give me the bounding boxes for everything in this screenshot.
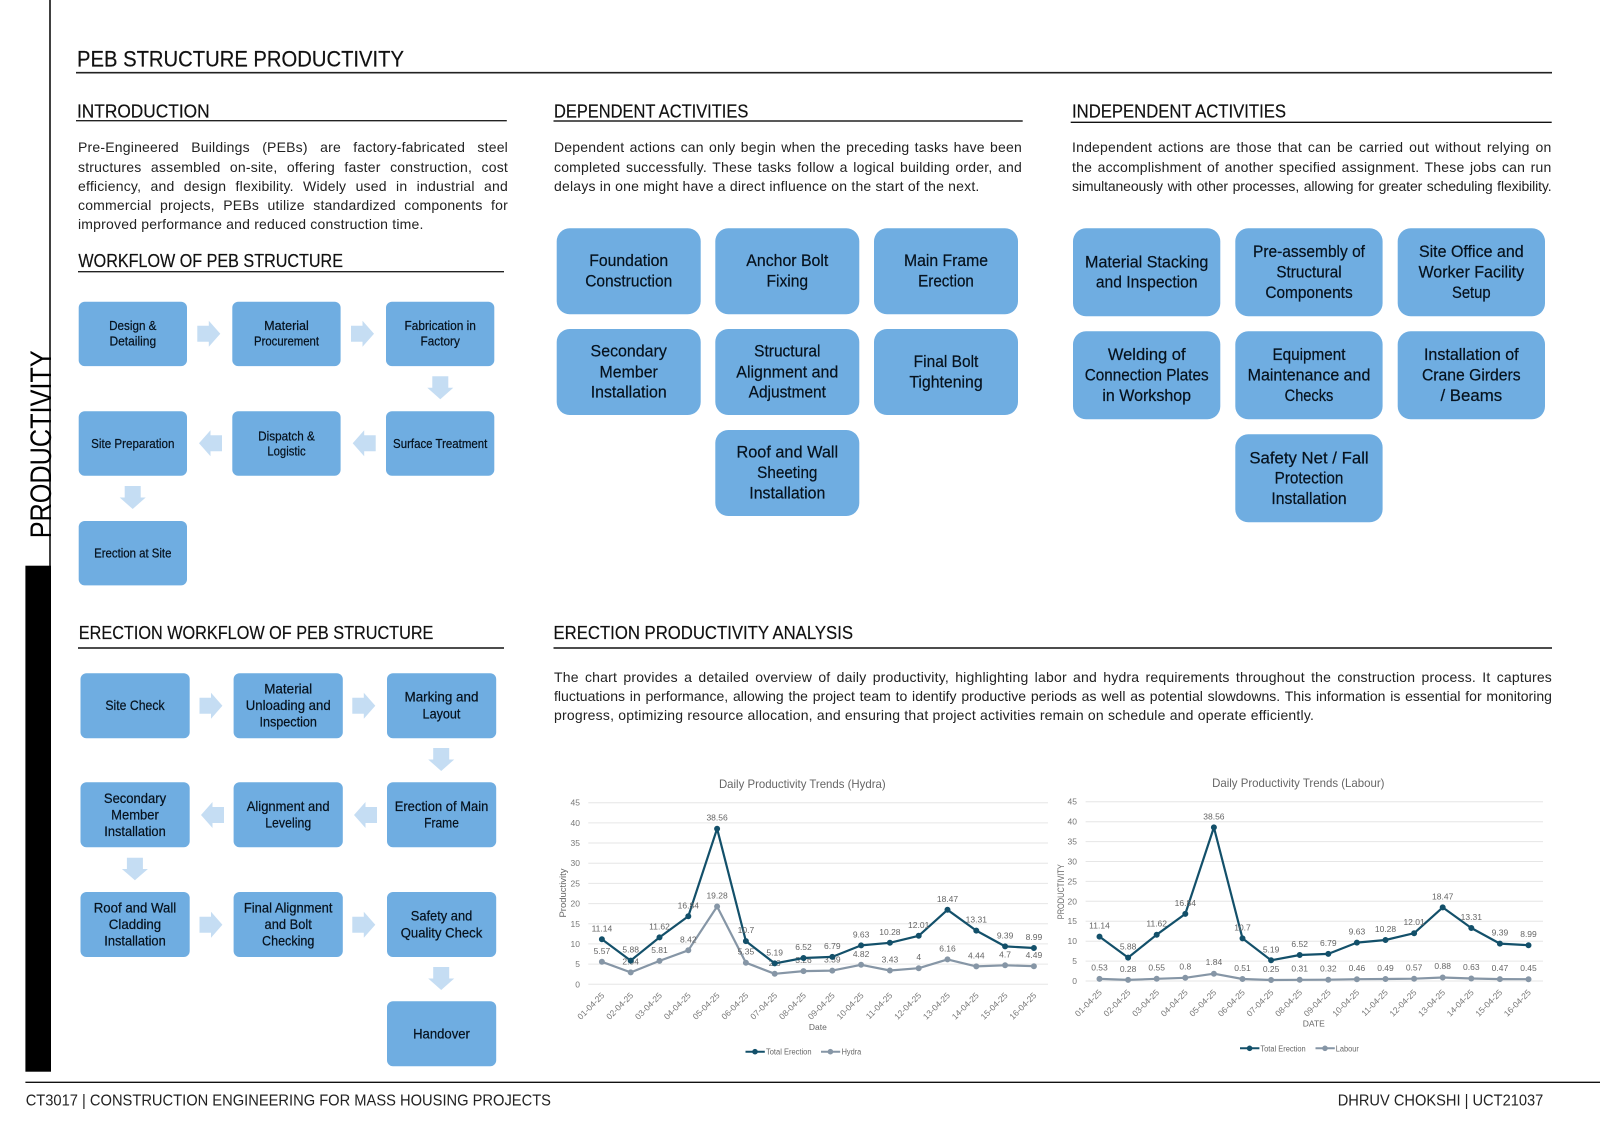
activity: roof and wall sheeting installation: Sheeting bbox=[757, 463, 817, 482]
step: erection at site: Erection at Site bbox=[94, 546, 171, 561]
x axis labels: 16-04-25 bbox=[1502, 987, 1533, 1018]
independent text: the accomplishment of another specified assignment. These jobs can run bbox=[1072, 159, 1552, 175]
series: total erection: 18.47 bbox=[937, 894, 958, 904]
step: alignment and leveling: Alignment and bbox=[247, 798, 330, 814]
x axis labels: 14-04-25 bbox=[950, 990, 981, 1021]
x axis labels: 10-04-25 bbox=[834, 990, 866, 1021]
x axis labels: 11-04-25 bbox=[864, 990, 895, 1021]
x axis labels: 11-04-25 bbox=[1359, 987, 1390, 1018]
y axis labels: 5 bbox=[1072, 956, 1077, 966]
series: total erection: 12.01 bbox=[1403, 917, 1425, 927]
activity: equipment maintenance and checks: Equipment bbox=[1272, 345, 1346, 364]
step: secondary member installation: Installation bbox=[104, 823, 166, 839]
footer bbox=[25, 1082, 1600, 1110]
y axis labels bbox=[1068, 797, 1077, 986]
series: labour: 0.49 bbox=[1377, 963, 1394, 973]
step: material procurement: Material bbox=[264, 318, 309, 333]
arrow bbox=[122, 858, 148, 880]
x axis labels: 06-04-25 bbox=[1216, 987, 1247, 1018]
activity: final bolt tightening bbox=[874, 329, 1018, 415]
panel: workflow of PEB structure bbox=[78, 250, 504, 585]
x axis labels: 13-04-25 bbox=[921, 990, 952, 1021]
activity: equipment maintenance and checks: Maintenance and bbox=[1248, 366, 1370, 385]
activity: welding of connection plates: Welding of bbox=[1108, 345, 1186, 364]
series: total erection: 6.79 bbox=[824, 941, 841, 951]
activity: safety net installation: Safety Net / Fall bbox=[1249, 448, 1369, 467]
activity: final bolt tightening: Final Bolt bbox=[914, 352, 979, 371]
series: total erection bbox=[592, 813, 1042, 966]
step: design and detailing: Design & bbox=[109, 318, 157, 333]
activity: site office and worker facility setup: Worker Facility bbox=[1418, 263, 1525, 282]
series: hydra: 4.82 bbox=[853, 949, 870, 959]
dependent text: Dependent actions can only begin when the preceding tasks have been bbox=[554, 139, 1022, 155]
y axis labels: 15 bbox=[1068, 916, 1077, 926]
series: total erection: 11.62 bbox=[649, 921, 670, 931]
series: labour: 0.55 bbox=[1148, 962, 1165, 972]
activity: material stacking and inspection: Material Stacking bbox=[1085, 252, 1208, 271]
series: total erection: 10.7 bbox=[1234, 922, 1251, 932]
step: fabrication in factory bbox=[386, 302, 494, 366]
series: hydra: 8.42 bbox=[680, 934, 697, 944]
independent text: Independent actions are those that can be carried out without relying on bbox=[1072, 139, 1552, 155]
series: hydra: 5.81 bbox=[651, 945, 668, 955]
y axis labels: 30 bbox=[571, 858, 580, 868]
panel: introduction: INTRODUCTION bbox=[77, 100, 210, 122]
activity: welding of connection plates: in Workshop bbox=[1102, 386, 1191, 405]
step: roof and wall cladding installation: Roof and Wall bbox=[94, 899, 176, 915]
series: labour: 0.63 bbox=[1463, 962, 1480, 972]
y axis labels: 35 bbox=[1068, 837, 1077, 847]
activity: foundation construction: Foundation bbox=[589, 251, 668, 270]
activity: installation of crane girders bbox=[1398, 331, 1545, 419]
series: total erection: 12.01 bbox=[908, 920, 930, 930]
step: final alignment and bolt checking: Final Alignment bbox=[244, 899, 333, 915]
x axis labels: 07-04-25 bbox=[748, 990, 779, 1021]
series: total erection: 13.31 bbox=[966, 915, 987, 925]
step: fabrication in factory: Factory bbox=[421, 334, 460, 348]
activity: site office and worker facility setup: Site Office and bbox=[1419, 242, 1524, 261]
activity: welding of connection plates: Connection Plates bbox=[1085, 366, 1209, 385]
step: final alignment and bolt checking bbox=[234, 892, 343, 957]
series: total erection: 10.7 bbox=[738, 925, 754, 935]
series: hydra: 19.28 bbox=[706, 890, 728, 900]
independent text bbox=[1072, 138, 1552, 198]
y axis labels: 45 bbox=[571, 798, 580, 808]
series: total erection bbox=[1089, 811, 1537, 963]
step: fabrication in factory: Fabrication in bbox=[405, 318, 476, 333]
x axis labels: 05-04-25 bbox=[1187, 987, 1219, 1018]
series: labour: 0.25 bbox=[1263, 964, 1280, 974]
step: erection of main frame: Erection of Main bbox=[395, 798, 488, 814]
panel: erection workflow bbox=[78, 622, 504, 1066]
x axis labels: 03-04-25 bbox=[1130, 987, 1161, 1018]
arrow bbox=[200, 693, 222, 719]
step: design and detailing bbox=[79, 302, 187, 366]
step: marking and layout: Marking and bbox=[404, 689, 478, 705]
analysis text: progress, optimizing resource allocation, and ensuring that project activities remain on schedule and operate efficiently. bbox=[554, 707, 1314, 723]
activity: installation of crane girders: Installation of bbox=[1424, 345, 1519, 364]
footer course name: CT3017 | CONSTRUCTION ENGINEERING FOR MASS HOUSING PROJECTS bbox=[26, 1093, 551, 1110]
step: site preparation bbox=[79, 411, 187, 476]
series: hydra bbox=[594, 890, 1042, 977]
introduction text bbox=[78, 138, 509, 236]
activity: foundation construction bbox=[557, 228, 701, 314]
x axis labels: 04-04-25 bbox=[662, 990, 693, 1021]
activity: roof and wall sheeting installation bbox=[715, 430, 859, 516]
step: erection at site bbox=[79, 521, 187, 585]
y axis labels: 10 bbox=[1068, 936, 1077, 946]
activity: structural alignment and adjustment bbox=[715, 329, 859, 415]
y axis labels: 0 bbox=[1072, 976, 1077, 986]
y axis labels: 20 bbox=[1068, 896, 1077, 906]
series: labour: 0.46 bbox=[1349, 963, 1365, 973]
step: final alignment and bolt checking: and Bolt bbox=[265, 916, 312, 932]
legend bbox=[1240, 1044, 1359, 1053]
series: total erection: 16.84 bbox=[678, 900, 699, 910]
y axis labels: 5 bbox=[575, 959, 580, 969]
step: dispatch and logistic bbox=[232, 411, 341, 476]
activity: anchor bolt fixing bbox=[715, 228, 859, 314]
analysis text bbox=[554, 668, 1553, 728]
x axis labels: 08-04-25 bbox=[1273, 987, 1304, 1018]
activity: pre-assembly of structural components: Structural bbox=[1276, 263, 1342, 282]
series: labour: 0.45 bbox=[1520, 963, 1537, 973]
step: safety and quality check: Quality Check bbox=[401, 924, 483, 940]
step: material procurement bbox=[232, 302, 341, 366]
panel: erection productivity analysis bbox=[554, 622, 1553, 1057]
x axis labels: 01-04-25 bbox=[575, 990, 607, 1021]
series: hydra: 5.35 bbox=[738, 947, 754, 957]
x axis labels: 07-04-25 bbox=[1244, 987, 1276, 1018]
arrow bbox=[353, 430, 376, 456]
series: hydra: 4.49 bbox=[1026, 950, 1042, 960]
panel: independent activities bbox=[1071, 100, 1552, 522]
step: handover: Handover bbox=[413, 1025, 470, 1041]
series: total erection: 9.39 bbox=[997, 930, 1014, 940]
arrow bbox=[352, 693, 375, 719]
activity: structural alignment and adjustment: Structural bbox=[754, 342, 820, 361]
series: total erection: 38.56 bbox=[706, 813, 728, 823]
x axis labels: 09-04-25 bbox=[1302, 987, 1333, 1018]
series: hydra: 3.39 bbox=[824, 955, 841, 965]
analysis heading: ERECTION PRODUCTIVITY ANALYSIS bbox=[554, 622, 853, 643]
legend: Labour bbox=[1336, 1044, 1359, 1053]
activity: site office and worker facility setup bbox=[1398, 228, 1545, 316]
chart title: Daily Productivity Trends (Hydra) bbox=[719, 777, 886, 791]
arrow bbox=[199, 430, 222, 456]
introduction text: structures assembled on-site, offering faster construction, cost bbox=[78, 159, 508, 175]
dependent text bbox=[554, 138, 1023, 198]
footer author: DHRUV CHOKSHI | UCT21037 bbox=[1338, 1093, 1543, 1110]
x axis labels: 02-04-25 bbox=[1101, 987, 1133, 1018]
y axis labels: 40 bbox=[571, 818, 580, 828]
series: total erection: 9.63 bbox=[1349, 927, 1365, 937]
panel: introduction bbox=[76, 100, 509, 236]
series: total erection: 11.14 bbox=[1089, 921, 1110, 931]
activity: main frame erection: Main Frame bbox=[904, 251, 988, 270]
erection workflow heading: ERECTION WORKFLOW OF PEB STRUCTURE bbox=[79, 622, 433, 643]
arrow bbox=[197, 321, 220, 347]
step: alignment and leveling bbox=[234, 782, 343, 847]
line chart: labour bbox=[1056, 776, 1543, 1053]
arrow bbox=[351, 321, 374, 347]
series: total erection: 5.19 bbox=[766, 947, 783, 957]
activity: structural alignment and adjustment: Adjustment bbox=[749, 383, 826, 402]
chart title: Daily Productivity Trends (Labour) bbox=[1212, 776, 1385, 790]
legend: Total Erection bbox=[766, 1048, 812, 1057]
activity: pre-assembly of structural components: Pre-assembly of bbox=[1253, 242, 1365, 261]
sidebar title: PRODUCTIVITY bbox=[25, 350, 58, 538]
activity: equipment maintenance and checks: Checks bbox=[1285, 386, 1333, 405]
series: total erection: 11.62 bbox=[1146, 919, 1167, 929]
step: site check bbox=[80, 673, 190, 738]
series: labour bbox=[1091, 957, 1537, 983]
arrow bbox=[352, 912, 375, 938]
step: erection of main frame bbox=[387, 782, 496, 847]
independent heading: INDEPENDENT ACTIVITIES bbox=[1072, 100, 1286, 121]
y axis labels: 45 bbox=[1068, 797, 1077, 807]
x axis labels: 06-04-25 bbox=[719, 990, 751, 1021]
x axis labels: 02-04-25 bbox=[604, 990, 635, 1021]
y axis labels: 25 bbox=[571, 878, 580, 888]
step: safety and quality check: Safety and bbox=[411, 908, 472, 924]
step: handover bbox=[387, 1001, 496, 1066]
y axis labels: 25 bbox=[1068, 876, 1077, 886]
series: hydra: 5.57 bbox=[594, 946, 610, 956]
step: site check: Site Check bbox=[105, 697, 165, 713]
series: labour: 0.47 bbox=[1492, 963, 1508, 973]
series: hydra: 3.26 bbox=[795, 955, 812, 965]
activity: site office and worker facility setup: Setup bbox=[1452, 283, 1491, 302]
series: total erection: 6.52 bbox=[795, 942, 812, 952]
independent text: simultaneously with other processes, allowing for greater scheduling flexibility. bbox=[1072, 178, 1552, 194]
x axis labels: 05-04-25 bbox=[690, 990, 722, 1021]
activity: pre-assembly of structural components bbox=[1235, 228, 1383, 316]
step: marking and layout bbox=[387, 673, 496, 738]
step: roof and wall cladding installation: Cladding bbox=[109, 916, 161, 932]
series: hydra: 2.94 bbox=[622, 956, 639, 966]
arrow bbox=[354, 802, 377, 828]
series: total erection: 11.14 bbox=[592, 923, 612, 933]
activity: roof and wall sheeting installation: Installation bbox=[749, 484, 825, 503]
series: total erection: 5.88 bbox=[1120, 942, 1137, 952]
activity: material stacking and inspection: and Inspection bbox=[1096, 273, 1198, 292]
series: total erection: 38.56 bbox=[1203, 811, 1225, 821]
step: marking and layout: Layout bbox=[423, 705, 461, 721]
x axis labels: 16-04-25 bbox=[1007, 990, 1039, 1021]
activity: pre-assembly of structural components: Components bbox=[1265, 283, 1353, 302]
x axis labels: 09-04-25 bbox=[806, 990, 837, 1021]
step: safety and quality check bbox=[387, 892, 496, 957]
legend: Hydra bbox=[842, 1048, 862, 1057]
x axis labels: 12-04-25 bbox=[1387, 987, 1419, 1018]
step: erection of main frame: Frame bbox=[424, 815, 459, 831]
activity: installation of crane girders: Crane Girders bbox=[1422, 366, 1521, 385]
series: labour: 0.32 bbox=[1320, 964, 1337, 974]
x axis labels: 13-04-25 bbox=[1416, 987, 1447, 1018]
y axis labels: 40 bbox=[1068, 817, 1077, 827]
arrow bbox=[120, 486, 146, 509]
step: surface treatment bbox=[386, 411, 494, 476]
series: total erection: 10.28 bbox=[1375, 924, 1396, 934]
analysis text: fluctuations in performance, allowing the project team to identify productive periods as well as potential slowdowns. This information is essential for monitoring bbox=[554, 688, 1552, 704]
arrow bbox=[201, 802, 224, 828]
series: labour: 0.28 bbox=[1120, 964, 1137, 974]
series: total erection: 8.99 bbox=[1520, 929, 1537, 939]
arrow bbox=[200, 912, 222, 938]
step: roof and wall cladding installation: Installation bbox=[104, 933, 166, 949]
step: dispatch and logistic: Logistic bbox=[267, 444, 306, 458]
x axis labels: 15-04-25 bbox=[1473, 987, 1505, 1018]
series: labour: 0.51 bbox=[1234, 963, 1251, 973]
x axis labels: 01-04-25 bbox=[1073, 987, 1104, 1018]
arrow bbox=[428, 748, 454, 771]
step: material unloading and inspection: Material bbox=[264, 680, 312, 696]
series: labour: 0.8 bbox=[1179, 962, 1191, 972]
y axis labels: 20 bbox=[571, 899, 580, 909]
activity: material stacking and inspection bbox=[1073, 228, 1220, 316]
workflow heading: WORKFLOW OF PEB STRUCTURE bbox=[78, 250, 343, 271]
arrow bbox=[427, 376, 453, 399]
step: roof and wall cladding installation bbox=[80, 892, 190, 957]
series: total erection: 9.39 bbox=[1492, 928, 1508, 938]
activity: final bolt tightening: Tightening bbox=[909, 373, 983, 392]
x axis labels: 14-04-25 bbox=[1445, 987, 1476, 1018]
activity: installation of crane girders: / Beams bbox=[1440, 386, 1502, 405]
series: labour: 0.53 bbox=[1091, 962, 1108, 972]
activity: anchor bolt fixing: Anchor Bolt bbox=[746, 251, 829, 270]
series: hydra: 3.43 bbox=[882, 954, 898, 964]
series: total erection: 6.79 bbox=[1320, 938, 1337, 948]
series: total erection: 9.63 bbox=[853, 929, 870, 939]
activity: secondary member installation: Secondary bbox=[591, 342, 667, 361]
series: total erection: 13.31 bbox=[1461, 912, 1482, 922]
series: total erection: 5.19 bbox=[1263, 944, 1280, 954]
series: total erection: 16.84 bbox=[1175, 898, 1196, 908]
activity: welding of connection plates bbox=[1073, 331, 1220, 419]
y axis labels bbox=[571, 798, 580, 989]
step: alignment and leveling: Leveling bbox=[265, 815, 311, 831]
x axis labels: 04-04-25 bbox=[1159, 987, 1190, 1018]
activity: safety net installation: Installation bbox=[1271, 489, 1347, 508]
introduction text: commercial projects, PEBs utilize standardized components for bbox=[78, 197, 508, 213]
activity: main frame erection: Erection bbox=[918, 272, 974, 291]
activity: secondary member installation: Installation bbox=[591, 383, 667, 402]
x axis labels: 12-04-25 bbox=[892, 990, 923, 1021]
x axis title: DATE bbox=[1303, 1019, 1325, 1029]
activity: secondary member installation: Member bbox=[600, 362, 658, 381]
step: final alignment and bolt checking: Checking bbox=[262, 933, 314, 949]
step: secondary member installation bbox=[80, 782, 190, 847]
y axis labels: 30 bbox=[1068, 856, 1077, 866]
series: total erection: 10.28 bbox=[879, 927, 901, 937]
activity: structural alignment and adjustment: Alignment and bbox=[736, 362, 838, 381]
activity: equipment maintenance and checks bbox=[1235, 331, 1383, 419]
x axis labels: 15-04-25 bbox=[978, 990, 1010, 1021]
arrow bbox=[428, 967, 454, 990]
activity: secondary member installation bbox=[557, 329, 701, 415]
activity: roof and wall sheeting installation: Roof and Wall bbox=[736, 442, 838, 461]
step: design and detailing: Detailing bbox=[109, 334, 156, 348]
activity: foundation construction: Construction bbox=[585, 272, 672, 291]
step: site preparation: Site Preparation bbox=[91, 436, 174, 451]
series: total erection: 18.47 bbox=[1432, 891, 1454, 901]
panel: dependent activities bbox=[554, 100, 1023, 516]
introduction text: improved performance and reduced construction time. bbox=[78, 216, 424, 232]
y axis title: Productivity bbox=[558, 868, 569, 918]
step: material unloading and inspection: Inspection bbox=[259, 714, 317, 730]
legend bbox=[746, 1048, 862, 1057]
series: labour: 1.84 bbox=[1206, 957, 1222, 967]
series: hydra: 4 bbox=[916, 952, 921, 962]
x axis labels bbox=[1073, 987, 1533, 1018]
sidebar bbox=[25, 0, 58, 1072]
y axis labels: 0 bbox=[575, 979, 580, 989]
y axis labels: 35 bbox=[571, 838, 580, 848]
x axis labels: 10-04-25 bbox=[1330, 987, 1362, 1018]
series: labour: 0.31 bbox=[1291, 964, 1308, 974]
step: material unloading and inspection bbox=[234, 673, 343, 738]
y axis labels: 10 bbox=[571, 939, 580, 949]
y axis title: PRODUCTIVITY bbox=[1056, 864, 1067, 919]
activity: safety net installation bbox=[1235, 434, 1383, 522]
step: dispatch and logistic: Dispatch & bbox=[258, 428, 315, 443]
series: total erection: 8.99 bbox=[1026, 932, 1042, 942]
series: labour: 0.57 bbox=[1406, 962, 1423, 972]
step: surface treatment: Surface Treatment bbox=[393, 436, 488, 451]
series: hydra: 6.16 bbox=[939, 943, 956, 953]
x axis labels: 08-04-25 bbox=[777, 990, 808, 1021]
legend: Total Erection bbox=[1260, 1044, 1306, 1053]
introduction text: efficiency, and design flexibility. Widely used in industrial and bbox=[78, 178, 508, 194]
x axis labels: 03-04-25 bbox=[633, 990, 664, 1021]
introduction text: Pre-Engineered Buildings (PEBs) are factory-fabricated steel bbox=[78, 139, 508, 155]
series: labour: 0.88 bbox=[1434, 961, 1451, 971]
series: total erection: 6.52 bbox=[1291, 939, 1308, 949]
series: hydra: 2.6 bbox=[769, 958, 781, 968]
main title: PEB STRUCTURE PRODUCTIVITY bbox=[77, 47, 404, 72]
y axis labels: 15 bbox=[571, 919, 580, 929]
dependent text: completed successfully. These tasks follow a logical building order, and bbox=[554, 159, 1022, 175]
analysis text: The chart provides a detailed overview of daily productivity, highlighting labor and hydra requirements throughout the construction process. It captures bbox=[554, 668, 1552, 684]
step: material unloading and inspection: Unloading and bbox=[246, 697, 331, 713]
series: total erection: 5.88 bbox=[622, 945, 639, 955]
activity: anchor bolt fixing: Fixing bbox=[766, 272, 808, 291]
dependent text: delays in one might have a direct influence on the start of the next. bbox=[554, 178, 980, 194]
line chart: hydra bbox=[558, 777, 1048, 1057]
x axis labels bbox=[575, 990, 1039, 1021]
series: hydra: 4.7 bbox=[999, 949, 1011, 959]
step: material procurement: Procurement bbox=[254, 334, 319, 348]
activity: main frame erection bbox=[874, 228, 1018, 314]
series: hydra: 4.44 bbox=[968, 950, 985, 960]
dependent heading: DEPENDENT ACTIVITIES bbox=[554, 100, 748, 121]
step: secondary member installation: Member bbox=[111, 806, 159, 822]
activity: safety net installation: Protection bbox=[1275, 469, 1343, 488]
x axis title: Date bbox=[809, 1022, 827, 1032]
step: secondary member installation: Secondary bbox=[104, 790, 166, 806]
